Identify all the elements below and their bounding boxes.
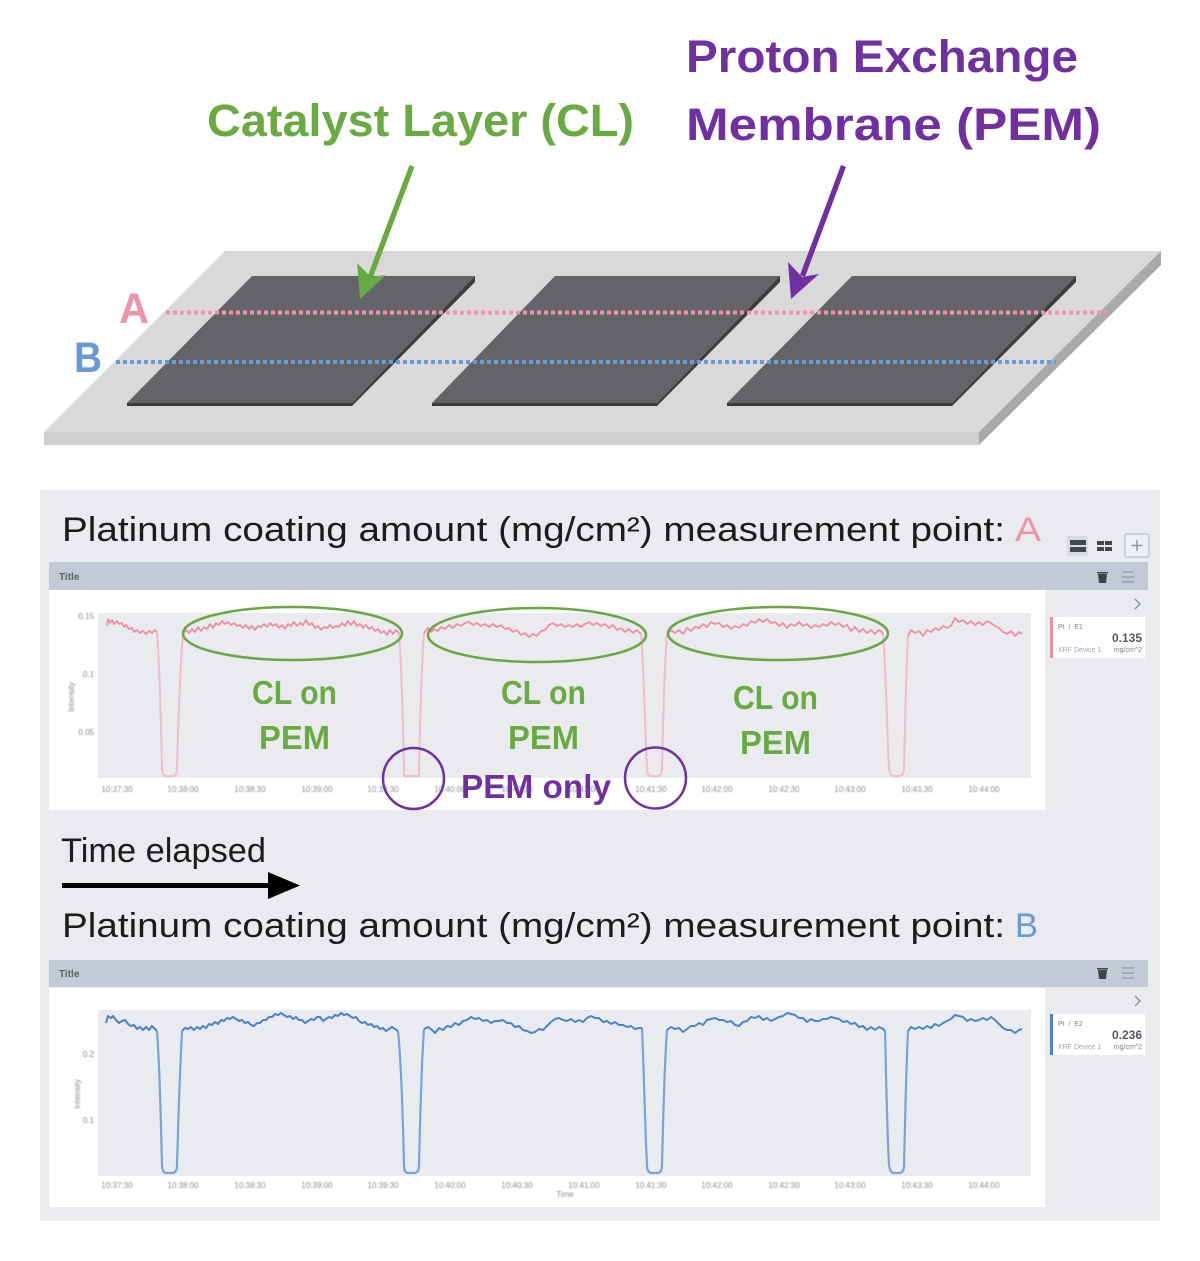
chart B: plot <box>49 988 1045 1207</box>
chart B: x axis: 10:43:00 <box>834 1181 866 1190</box>
heading: measurement point A: A <box>1015 511 1041 549</box>
heading: measurement point A: Platinum coating amount (mg/cm²) measurement point: <box>62 511 1005 549</box>
chart A: x axis: 10:43:30 <box>901 785 933 794</box>
chart A: x axis: 10:44:00 <box>968 785 1000 794</box>
chart B: signal line <box>106 1013 1022 1033</box>
heading: measurement point B: B <box>1015 907 1038 945</box>
chart B: y axis: 0.1 <box>83 1116 95 1125</box>
callout text: CL on PEM 2: PEM <box>508 719 579 756</box>
panel: chart A header <box>49 562 1148 590</box>
catalyst patch 1 <box>127 276 475 406</box>
chart B: chevron <box>1135 996 1140 1006</box>
chart A: y axis: 0.15 <box>78 612 95 621</box>
callout text: CL on PEM 3 <box>733 679 818 761</box>
chart B: value card: XRF Device 1 <box>1058 1044 1101 1051</box>
chart B: x axis: 10:39:30 <box>367 1181 399 1190</box>
chart A: x axis: 10:41:30 <box>635 785 667 794</box>
measurement line B <box>116 360 1056 364</box>
callouts: PEM only circles <box>383 748 686 809</box>
chart A: x axis: 10:40:00 <box>434 785 466 794</box>
chart A: value card: mg/cm^2 <box>1114 647 1142 654</box>
catalyst patch 3 <box>727 276 1076 406</box>
chart A: x axis: 10:37:30 <box>101 785 133 794</box>
chart B: x axis: 10:37:30 <box>101 1181 133 1190</box>
chart B: x axis: 10:42:00 <box>701 1181 733 1190</box>
panel: chart B header <box>49 960 1148 987</box>
chart B: value card: mg/cm^2 <box>1114 1044 1142 1051</box>
panel: chart B header: Title <box>59 969 80 980</box>
label A: A <box>119 285 149 333</box>
chart A: x axis: 10:39:30 <box>367 785 399 794</box>
chart B: x axis: 10:38:30 <box>234 1181 266 1190</box>
chart B: x axis: 10:43:30 <box>901 1181 933 1190</box>
label B: B <box>74 334 102 382</box>
chart B: x axis: Time <box>556 1190 574 1199</box>
chart B: x axis <box>101 1181 1000 1199</box>
chart B: y axis <box>73 1050 95 1125</box>
panel: chart A header: Title <box>59 572 80 583</box>
chart A: value card: 0.135 <box>1112 631 1142 645</box>
catalyst patch 2 <box>432 276 780 406</box>
chart A: y axis: 0.05 <box>78 728 95 737</box>
chart A: value card: Pt / E1 <box>1058 624 1083 631</box>
arrow: membrane <box>788 165 846 299</box>
arrow: catalyst layer <box>357 165 414 299</box>
chart B: x axis: 10:42:30 <box>768 1181 800 1190</box>
chart A: x axis: 10:38:30 <box>234 785 266 794</box>
chart B: y axis: 0.2 <box>83 1050 95 1059</box>
callout text: CL on PEM 3: CL on <box>733 679 818 716</box>
chart A: signal line <box>107 618 1022 637</box>
chart B: x axis: 10:40:00 <box>434 1181 466 1190</box>
plate <box>44 251 1161 445</box>
chart A: x axis: 10:42:30 <box>768 785 800 794</box>
chart B: x axis: 10:44:00 <box>968 1181 1000 1190</box>
chart A: chevron <box>1135 599 1140 609</box>
chart A: x axis <box>101 785 1000 794</box>
callout text: PEM only: PEM only <box>461 768 612 805</box>
chart A: x axis: 10:40:30 <box>501 785 533 794</box>
callout text: CL on PEM 1: CL on <box>252 674 337 711</box>
chart A: plot <box>49 590 1045 810</box>
measurement line A <box>166 310 1106 314</box>
callouts: CL regions <box>183 607 888 662</box>
chart A: value card <box>1050 617 1145 658</box>
chart A: x axis: 10:43:00 <box>834 785 866 794</box>
heading: measurement point B: Platinum coating amount (mg/cm²) measurement point: <box>62 907 1005 945</box>
heading: Proton Exchange Membrane <box>686 31 1101 150</box>
chart B: x axis: 10:39:00 <box>301 1181 333 1190</box>
chart B: value card: 0.236 <box>1112 1028 1142 1042</box>
chart A: value card: XRF Device 1 <box>1058 647 1101 654</box>
chart A: y axis: 0.1 <box>83 670 95 679</box>
chart A: x axis: 10:41:00 <box>568 785 600 794</box>
callout text: CL on PEM 2: CL on <box>501 674 586 711</box>
label: time elapsed: Time elapsed <box>61 832 266 870</box>
arrow: time direction <box>62 872 300 899</box>
heading: Proton Exchange Membrane: Proton Exchange <box>686 31 1078 82</box>
callout text: CL on PEM 3: PEM <box>740 724 811 761</box>
chart A: x axis: 10:38:00 <box>167 785 199 794</box>
chart A: y axis: Intensity <box>67 682 76 712</box>
callout text: CL on PEM 1: PEM <box>259 719 330 756</box>
icon: view toggles <box>1067 534 1149 557</box>
callout text: CL on PEM 1 <box>252 674 337 756</box>
chart B: x axis: 10:40:30 <box>501 1181 533 1190</box>
chart A: x axis: 10:42:00 <box>701 785 733 794</box>
callout text: CL on PEM 2 <box>501 674 586 756</box>
chart B: x axis: 10:41:00 <box>568 1181 600 1190</box>
diagram: membrane plate with catalyst patches <box>44 251 1161 445</box>
chart B: value card <box>1050 1014 1145 1055</box>
panel: measurement charts <box>40 490 1160 1221</box>
chart B: dips <box>157 1028 908 1173</box>
heading: Proton Exchange Membrane: Membrane (PEM) <box>686 99 1101 150</box>
chart A: x axis: 10:39:00 <box>301 785 333 794</box>
chart B: y axis: Intensity <box>73 1079 82 1109</box>
chart B: x axis: 10:38:00 <box>167 1181 199 1190</box>
chart A: dips <box>157 632 908 776</box>
chart B: x axis: 10:41:30 <box>635 1181 667 1190</box>
chart B: value card: Pt / E2 <box>1058 1021 1083 1028</box>
heading: Catalyst Layer: Catalyst Layer (CL) <box>207 95 634 146</box>
chart A: y axis <box>67 612 95 737</box>
